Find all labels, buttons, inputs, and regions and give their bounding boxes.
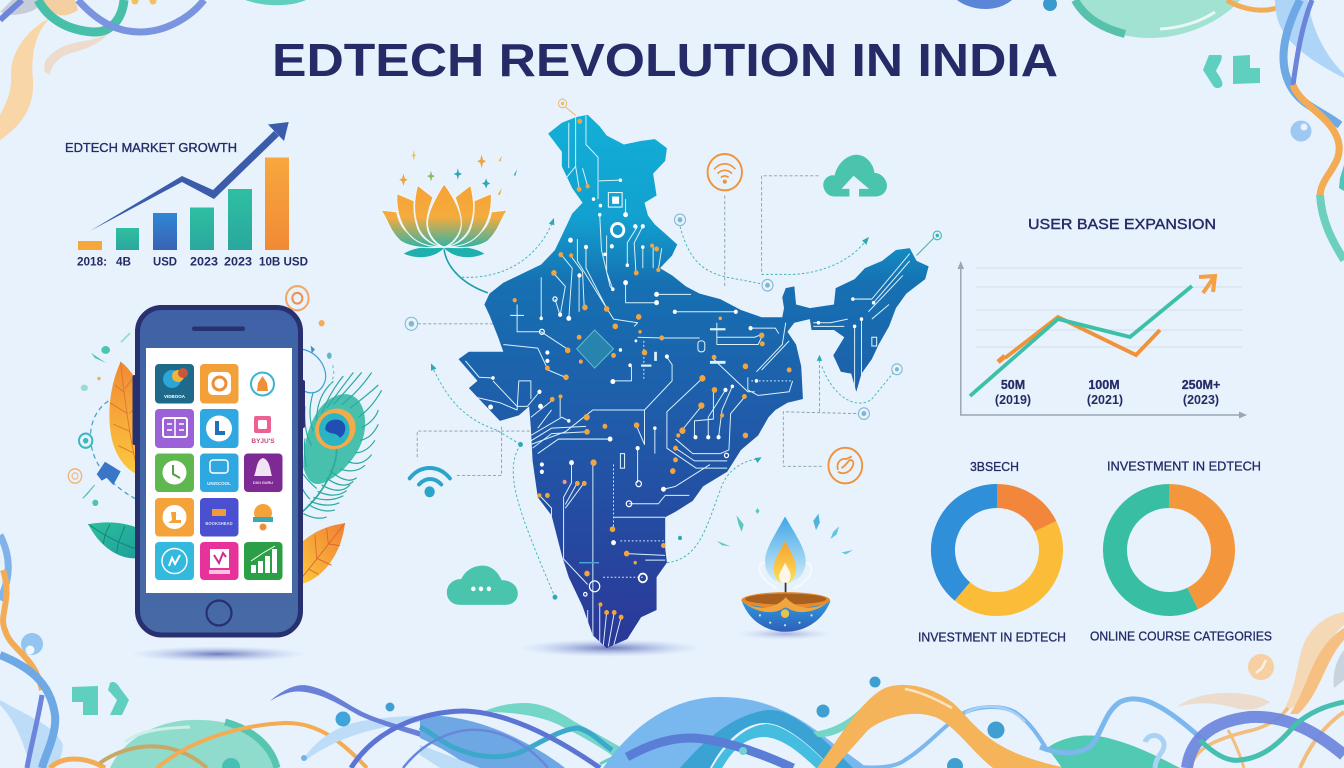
panel: right donut: [1090, 460, 1272, 644]
icon: orange leaf left: [109, 362, 137, 474]
shapes: teal corner marks bottom left: [72, 682, 129, 715]
app: camera: [200, 364, 238, 404]
donut heading: INVESTMENT IN EDTECH: [1107, 460, 1261, 474]
screen: [146, 348, 292, 593]
bar labels: 2023: [224, 254, 252, 268]
icon: cloud dots: [447, 566, 518, 605]
app: pink board: [200, 542, 238, 580]
decorative ribbons: left bottom: [0, 535, 63, 768]
panel: phone decorations: [68, 286, 382, 584]
app: book: [155, 409, 194, 448]
decorative ribbons: top right: [957, 0, 1344, 260]
home button: [206, 600, 232, 626]
donut label: INVESTMENT IN EDTECH: [918, 630, 1066, 644]
axes: [958, 261, 1247, 418]
icon: diya lamp: [717, 508, 853, 632]
small ring nodes: [539, 297, 729, 596]
chart labels: 250M+: [1182, 378, 1220, 392]
panel: edtech market growth: [65, 122, 308, 268]
diamond chip: [577, 330, 614, 368]
app: indigo: BOOKSHEAD: [205, 521, 233, 526]
gridlines: [976, 268, 1242, 347]
app: clock: [155, 454, 194, 492]
app: green bars: [244, 542, 282, 580]
chart labels: 50M: [1001, 378, 1025, 392]
flame: [759, 517, 811, 594]
chip square: [608, 193, 622, 207]
bowl: [742, 601, 830, 632]
panel: smartphone: [132, 308, 305, 635]
orange nodes: [513, 119, 792, 620]
phone side buttons: [132, 375, 138, 445]
arrowheads: [431, 218, 869, 600]
app: L bubble: [200, 409, 238, 448]
speaker: [192, 326, 245, 331]
map of india: [458, 114, 928, 648]
chart labels: (2023): [1183, 393, 1219, 407]
connectors: [417, 106, 935, 597]
panel: central map: [380, 99, 944, 657]
chart labels: [995, 378, 1220, 407]
icon: orange leaf right: [300, 523, 345, 584]
bar labels: 10B USD: [259, 254, 308, 268]
bar chart: [78, 158, 289, 250]
app: orange badge: [253, 504, 273, 530]
donut chart: [943, 496, 1051, 604]
app: study: [200, 454, 238, 492]
decorative waves: bottom band: [50, 612, 1344, 768]
bar labels: 2023: [190, 254, 218, 268]
app: study: UNISCOOL: [207, 481, 231, 486]
decorative ribbons: top left: [0, 0, 306, 140]
icon: wifi orange: [708, 154, 742, 190]
donut label: ONLINE COURSE CATEGORIES: [1090, 630, 1272, 644]
icon: lotus: [380, 150, 517, 293]
app grid: [155, 364, 282, 580]
icon: dashed orbit: [68, 286, 334, 506]
app: globe: [155, 364, 194, 404]
app: duck: [155, 498, 194, 536]
chart labels: 100M: [1088, 378, 1120, 392]
bar labels: USD: [153, 254, 177, 268]
diya shadow: [737, 628, 833, 640]
heading: edtech market growth: EDTECH MARKET GROWTH: [65, 140, 237, 155]
line chart: [970, 276, 1215, 396]
donut heading: 3BSECH: [970, 460, 1019, 474]
icon: peacock feather: [302, 372, 382, 518]
app: byjus: [251, 416, 275, 445]
bar labels: 4B: [116, 254, 131, 268]
node rings: [405, 99, 941, 419]
icon: cloud upload: [823, 155, 887, 197]
ring node: [611, 223, 624, 237]
white nodes: [488, 178, 875, 545]
app: byjus: BYJU'S: [251, 438, 275, 445]
shapes: teal corner marks top right: [1203, 55, 1260, 88]
arrow: growth trend: [90, 122, 289, 231]
circuit traces: [465, 115, 910, 648]
bar labels: [77, 254, 308, 268]
app: portrait: DIGI GURU: [253, 481, 273, 485]
phone body: [138, 308, 300, 635]
app: portrait: [244, 454, 282, 492]
title: EDTECH REVOLUTION IN INDIA: [272, 34, 1058, 86]
chart labels: (2021): [1087, 393, 1123, 407]
app: temple badge: [251, 372, 274, 396]
heading: user base expansion: USER BASE EXPANSION: [1028, 216, 1216, 233]
app: globe: VIDBOOA: [164, 394, 186, 399]
app: chart ring: [155, 542, 194, 580]
map shadow: [518, 639, 702, 657]
chart labels: (2019): [995, 393, 1031, 407]
panel: user base expansion: [958, 216, 1247, 418]
bar labels: 2018:: [77, 254, 107, 268]
small block icons: [579, 328, 877, 563]
icon: teal leaf left: [88, 522, 137, 558]
sparkles: [399, 150, 517, 195]
sparks: [717, 508, 853, 554]
app: indigo: [200, 498, 238, 536]
phone shadow: [130, 646, 306, 662]
icon: orange circle badge: [828, 448, 862, 483]
panel: left donut: [918, 460, 1066, 644]
donut chart: [1115, 496, 1223, 604]
icon: wifi teal: [410, 468, 450, 497]
